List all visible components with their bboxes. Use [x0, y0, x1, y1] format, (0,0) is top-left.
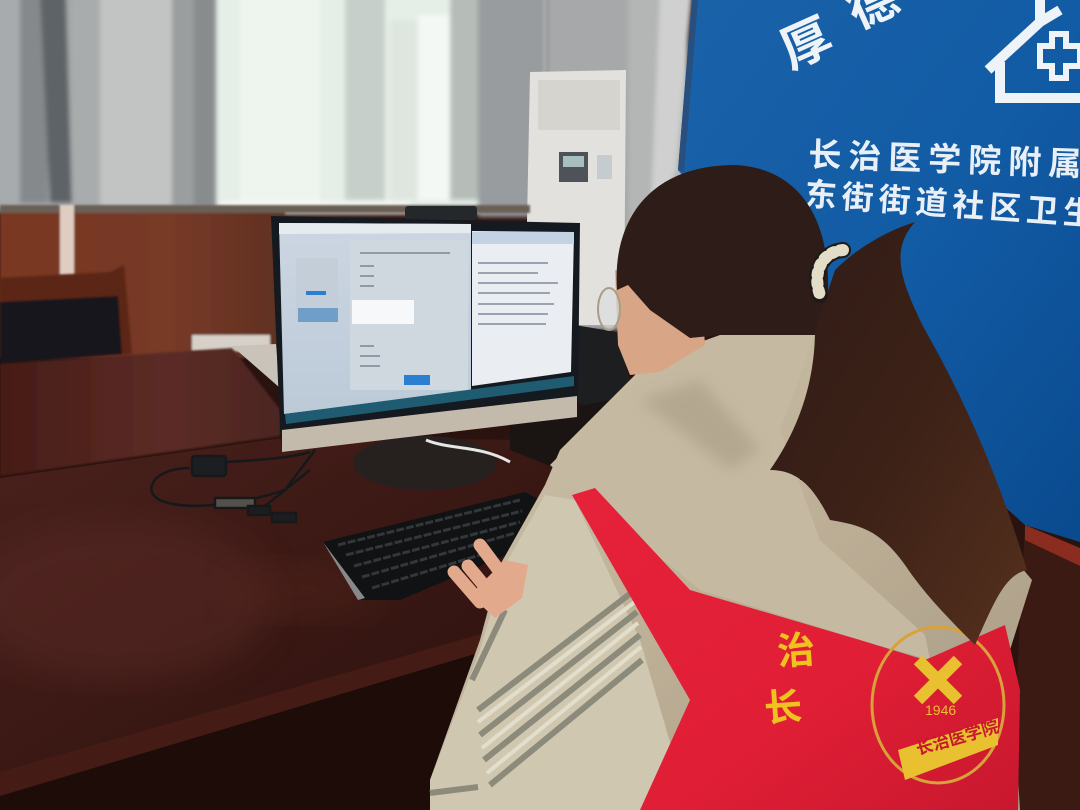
woman: 长: [763, 686, 804, 731]
front table: [0, 438, 560, 810]
white cable: [426, 440, 510, 462]
dark shadow behind the monitor: [510, 400, 610, 470]
hand: [454, 545, 528, 618]
glasses: [598, 288, 620, 330]
banner: logo: [988, 0, 1080, 98]
webcam: [405, 206, 477, 220]
window with sheer curtain: [216, 0, 548, 217]
banner: top slogan: [772, 0, 907, 80]
monitor body: [271, 216, 580, 452]
hood: [550, 335, 930, 660]
screen right document: [472, 231, 574, 386]
woman: [430, 165, 1032, 810]
monitor: [271, 216, 580, 490]
grey wall and pillar: [546, 0, 692, 330]
coat: [430, 335, 1032, 810]
blue banner: [678, 0, 1080, 542]
screen left window: [279, 223, 471, 414]
chair: [0, 265, 132, 364]
side table strip: [232, 344, 280, 388]
monitor stand: [353, 436, 497, 490]
air conditioner: [527, 70, 626, 325]
right floor and wall: [1010, 525, 1080, 810]
curtains: [0, 0, 227, 212]
back table: [0, 348, 282, 476]
vest text: 治: [776, 629, 817, 674]
taskbar: [285, 376, 574, 424]
monitor chin: [282, 396, 577, 452]
wall panelling: [0, 205, 530, 358]
keyboard: [323, 492, 540, 600]
banner: top slogan: 厚: [772, 8, 841, 80]
sleeve stripes: [430, 590, 642, 793]
PC tower behind monitor: [575, 325, 630, 420]
vest emblem: [872, 627, 1004, 783]
hair on head: [617, 165, 828, 338]
coat sleeve: [430, 495, 690, 810]
hair tie: [817, 250, 843, 295]
cables and adapter: [151, 450, 315, 522]
ponytail: [770, 222, 1027, 645]
vest emblem: 1946: [925, 702, 956, 718]
face: [615, 270, 705, 375]
red vest: [572, 488, 1020, 810]
vest emblem: 长治医学院: [914, 716, 1001, 759]
